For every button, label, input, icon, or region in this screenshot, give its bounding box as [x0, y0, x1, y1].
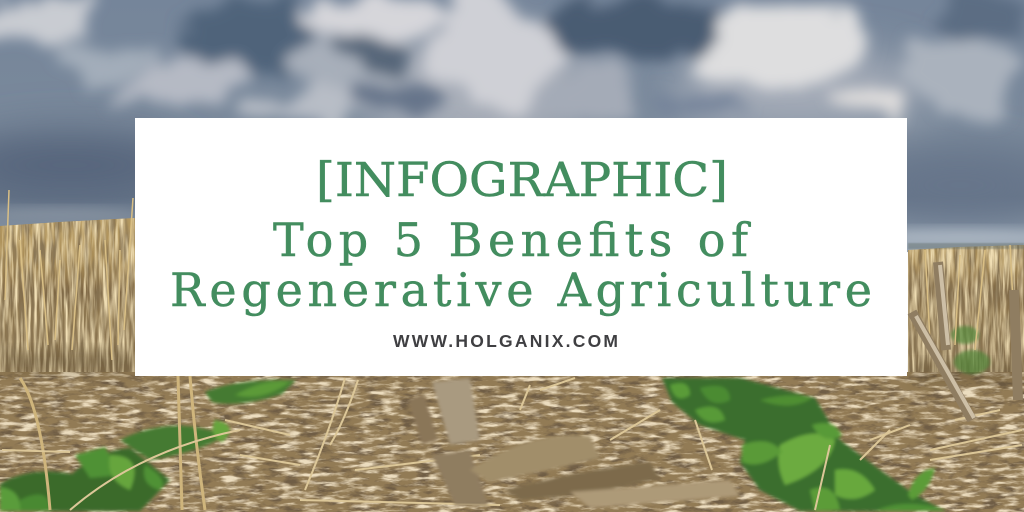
- website url: WWW.HOLGANIX.COM: [393, 331, 618, 351]
- green plants left: [0, 380, 296, 511]
- heading: [INFOGRAPHIC]: [INFOGRAPHIC]: [316, 153, 728, 208]
- heading: Top 5 Benefits of: Top 5 Benefits of: [273, 213, 751, 267]
- corn husk debris: [408, 378, 740, 508]
- heading: Regenerative Agriculture: Regenerative Agriculture: [170, 263, 872, 317]
- white title panel: [135, 118, 907, 376]
- green plants right: [662, 326, 990, 511]
- background: cloudy sky: [0, 0, 1024, 252]
- background: stubble field: [0, 212, 1024, 512]
- straw stalks and corn stems: [2, 190, 1022, 510]
